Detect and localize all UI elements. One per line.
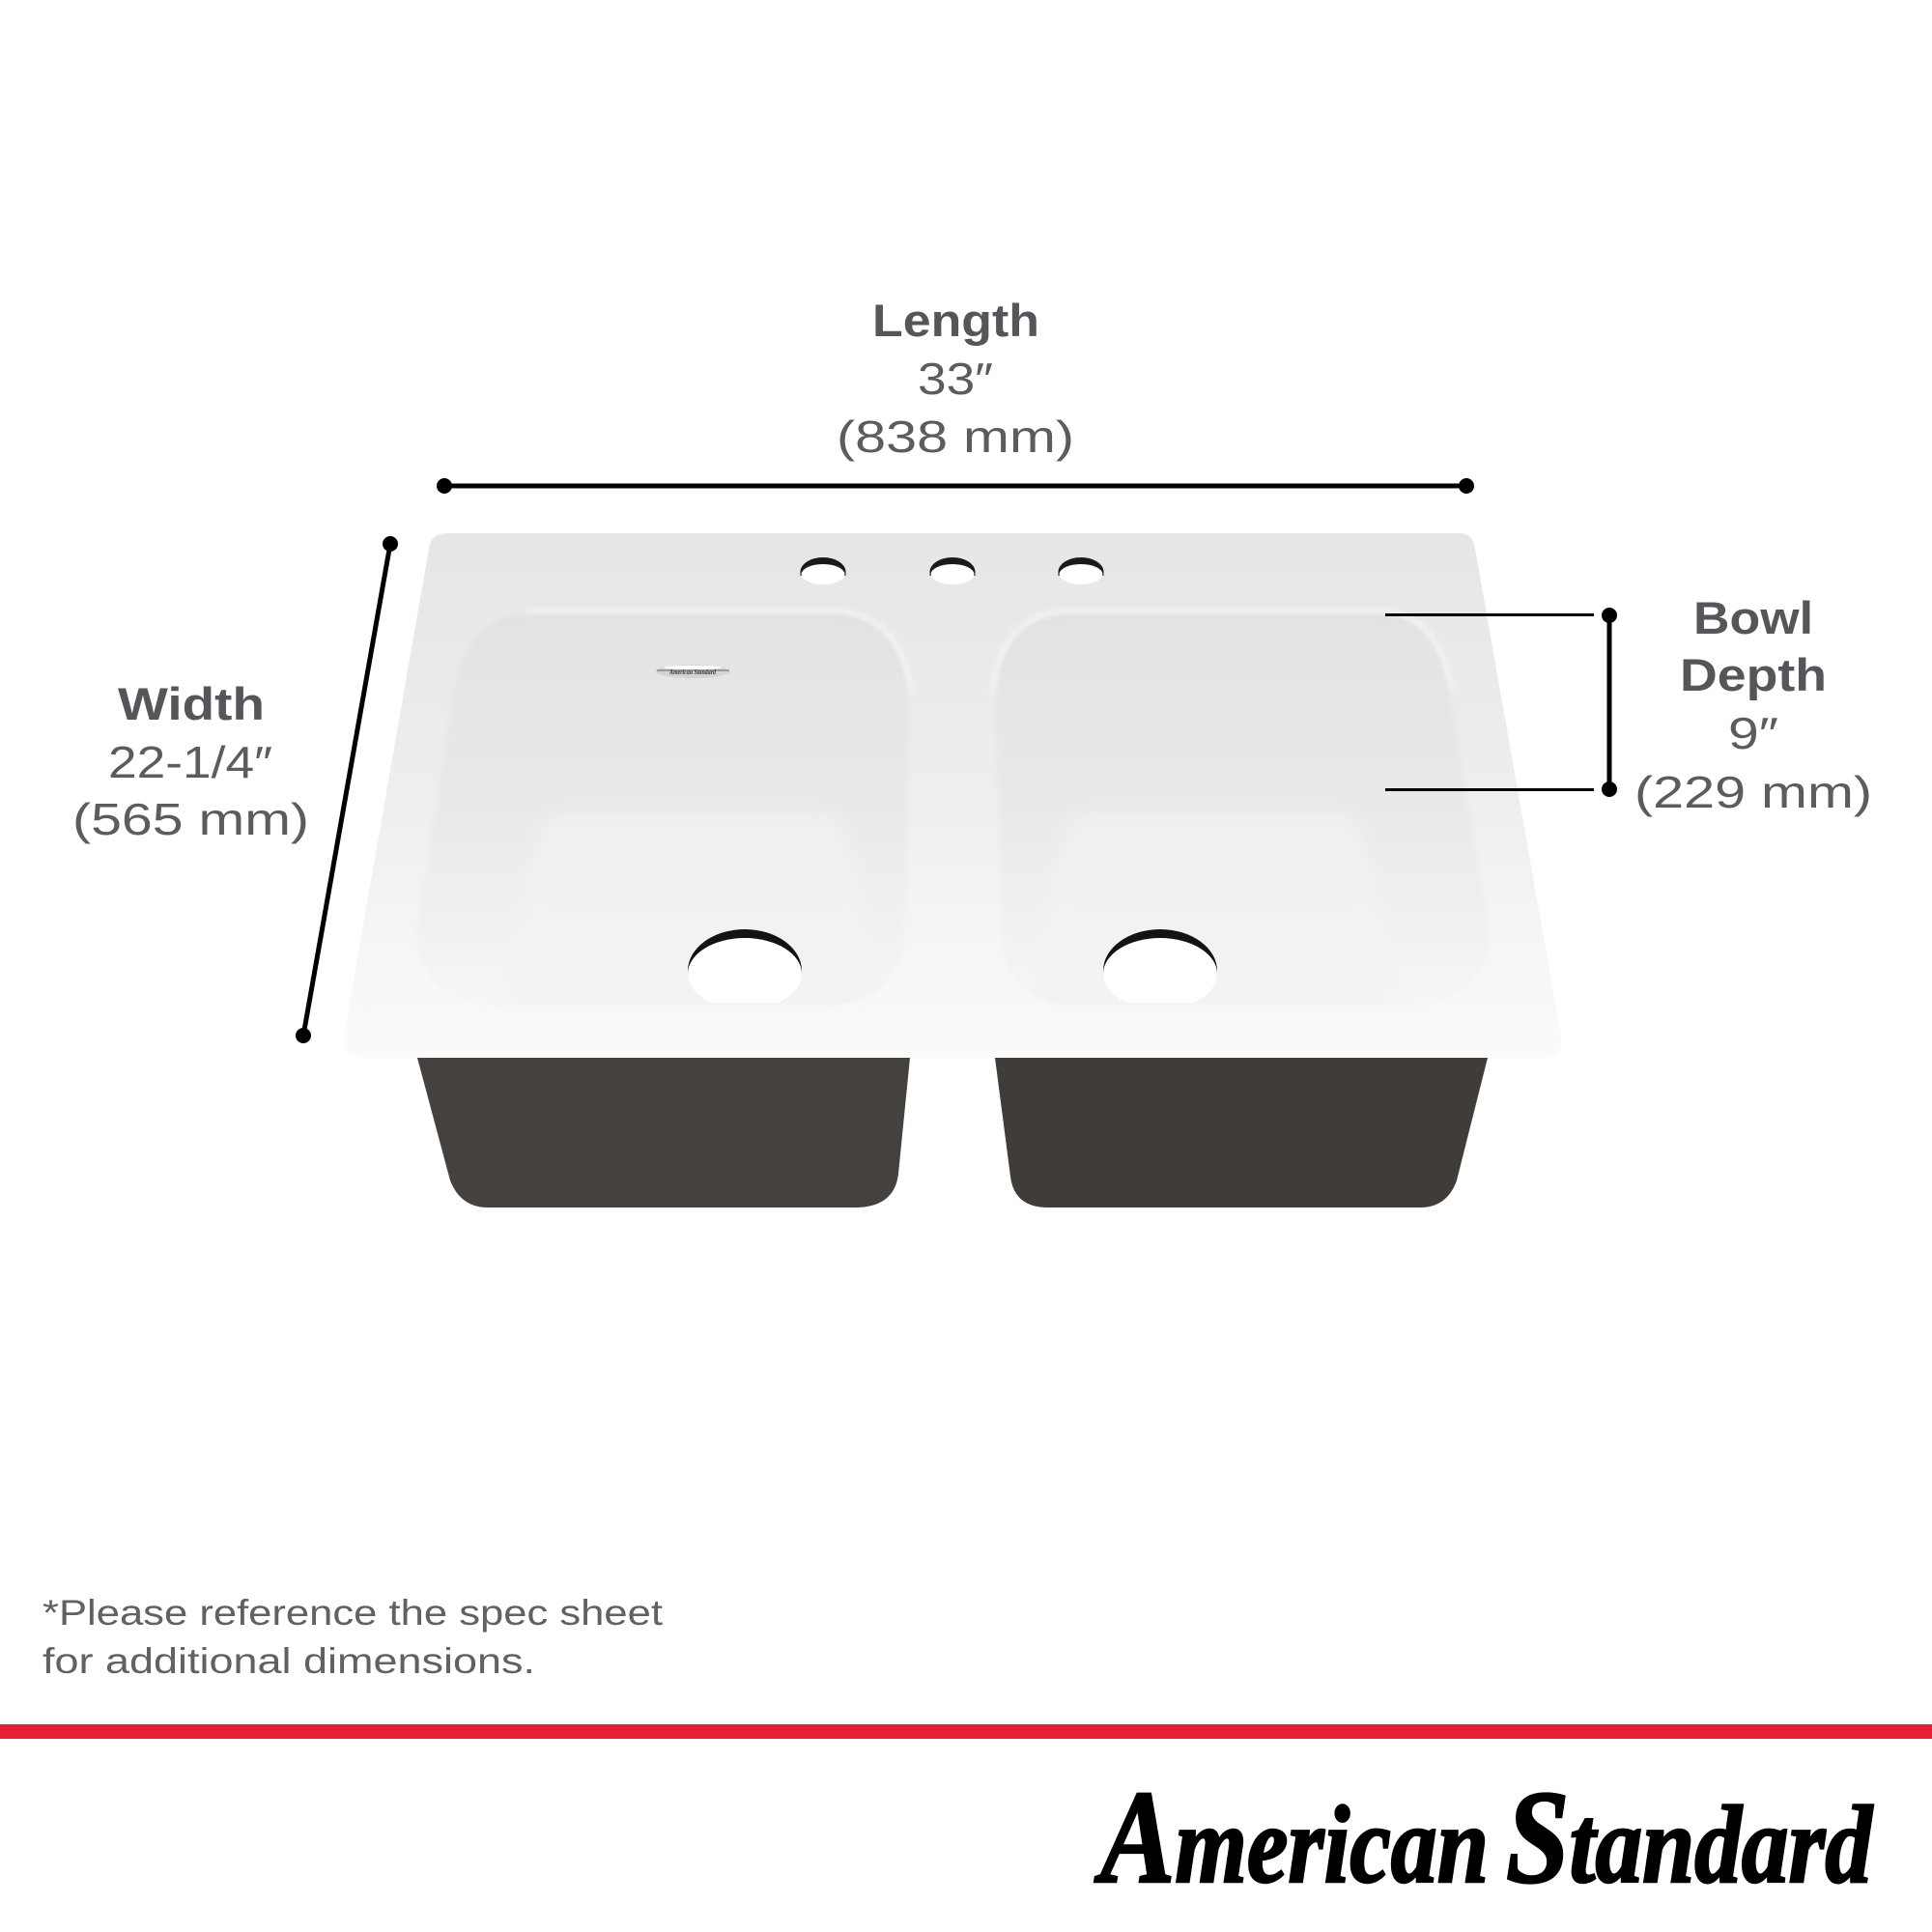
logo: American Standard wordmark	[1094, 1763, 1874, 1911]
icon: right tub underside	[995, 1058, 1488, 1208]
logo: American Standard wordmark: Standard	[1506, 1763, 1874, 1911]
heading: width dimension text	[72, 678, 309, 844]
text block: footnote: for additional dimensions.	[43, 1641, 535, 1681]
heading: width dimension text: 22-1/4″	[108, 737, 272, 787]
heading: length dimension text: Length	[872, 295, 1039, 346]
text block: footnote	[43, 1593, 664, 1681]
heading: length dimension text: 33″	[918, 354, 993, 404]
heading: length dimension text	[837, 295, 1074, 462]
arrow: width measure line	[296, 536, 398, 1043]
icon: left tub underside	[417, 1058, 910, 1208]
heading: width dimension text: (565 mm)	[72, 794, 309, 844]
icon: left drain hole	[688, 929, 802, 1009]
panel: left bowl	[416, 611, 912, 1024]
icon: faucet hole left	[800, 557, 846, 584]
heading: bowl depth dimension text: Bowl	[1693, 592, 1813, 643]
panel: sink top deck	[343, 533, 1562, 1058]
icon: right drain hole	[1103, 929, 1217, 1009]
arrow: length measure line	[437, 478, 1474, 494]
arrow: bowl depth measure	[1385, 608, 1617, 797]
heading: bowl depth dimension text: 9″	[1728, 708, 1778, 758]
heading: bowl depth dimension text	[1634, 592, 1872, 817]
icon: chrome overflow badge: American Standard	[668, 668, 716, 676]
heading: length dimension text: (838 mm)	[837, 412, 1074, 462]
panel: right bowl	[992, 611, 1490, 1024]
icon: faucet hole right	[1059, 557, 1103, 584]
heading: width dimension text: Width	[118, 678, 265, 729]
icon: chrome overflow badge	[656, 665, 729, 678]
icon: faucet hole centre	[929, 557, 976, 584]
text block: footnote: *Please reference the spec sheet	[43, 1593, 664, 1633]
heading: bowl depth dimension text: Depth	[1680, 649, 1827, 700]
heading: bowl depth dimension text: (229 mm)	[1634, 767, 1872, 817]
red divider bar	[0, 1724, 1932, 1739]
logo: American Standard wordmark: American	[1094, 1763, 1489, 1911]
